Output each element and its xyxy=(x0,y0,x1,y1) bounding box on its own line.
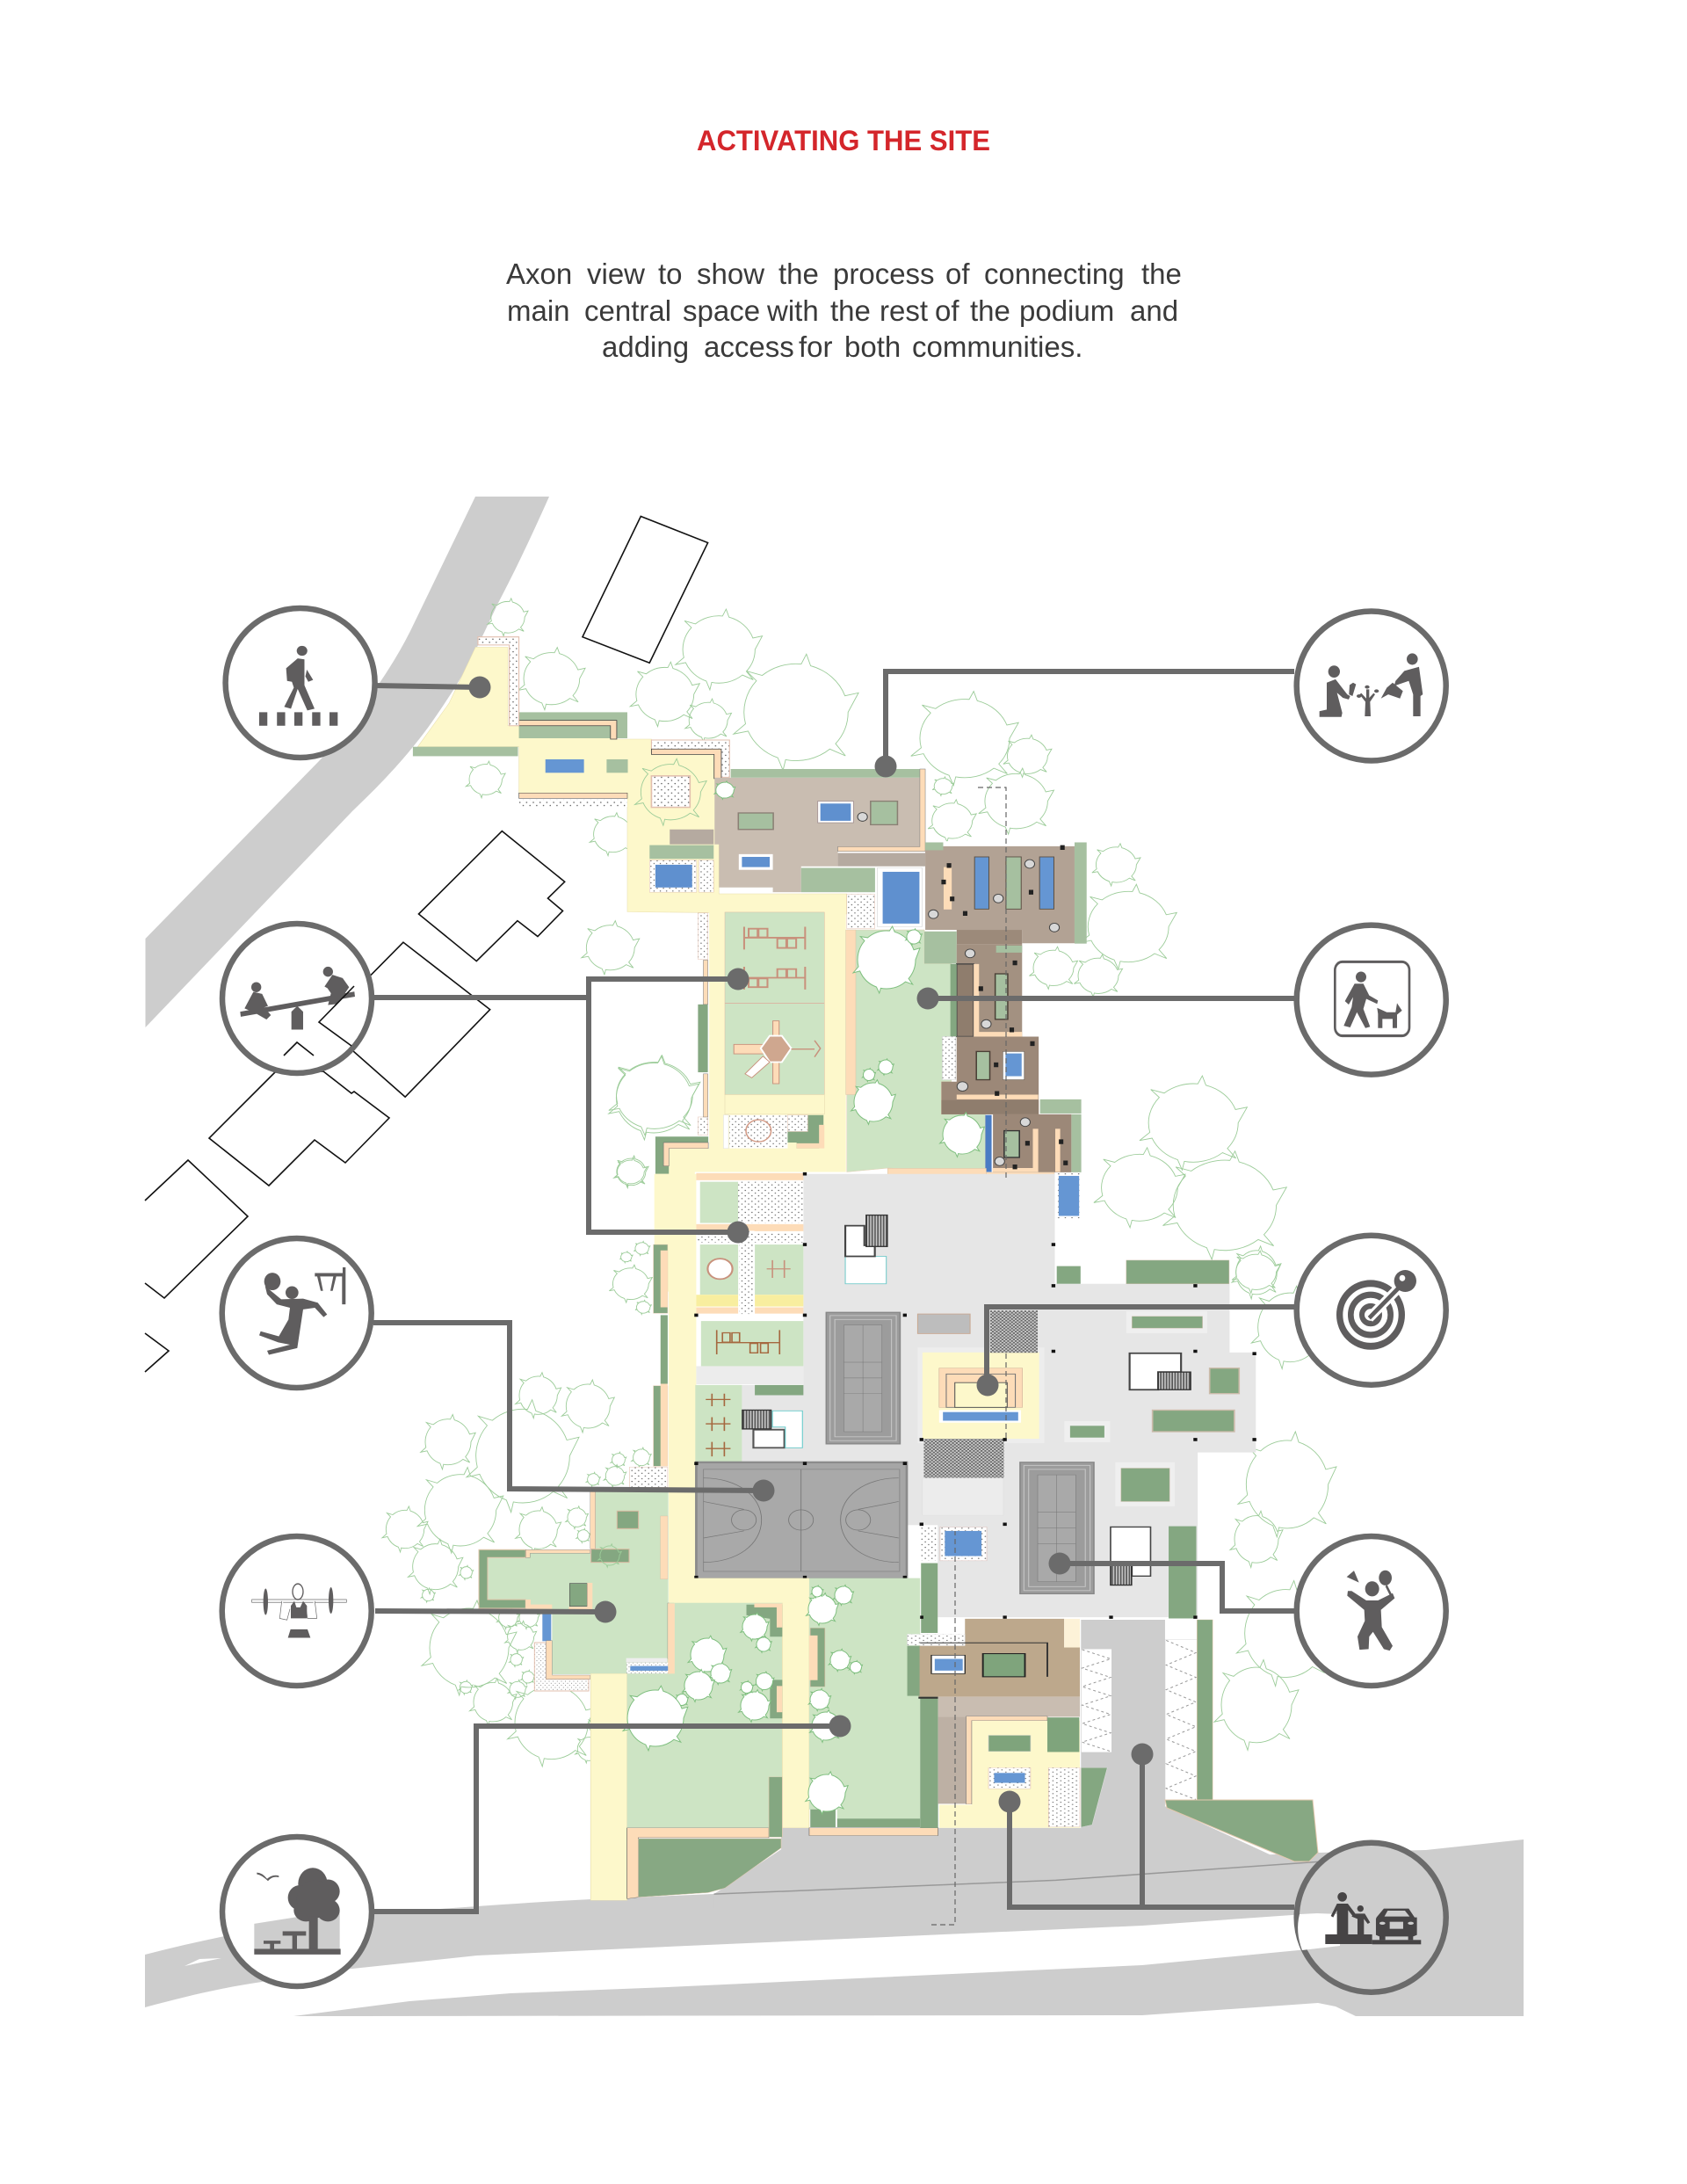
building: house 6 fragment xyxy=(145,1333,169,1372)
icon: seesaw xyxy=(222,924,372,1073)
cream stair xyxy=(1064,1619,1080,1648)
bench xyxy=(809,1636,818,1680)
corner pit xyxy=(787,1115,807,1131)
play tower xyxy=(734,1021,821,1084)
trees: south east group xyxy=(1214,1246,1336,1750)
green corner planter xyxy=(787,1115,823,1149)
peach seat wall xyxy=(519,721,617,739)
divide xyxy=(725,1002,824,1004)
planter xyxy=(1047,1717,1079,1752)
peach xyxy=(568,1607,592,1609)
white bar xyxy=(723,1115,728,1149)
yellow path column xyxy=(655,1174,809,1810)
description text block: for xyxy=(799,330,833,363)
trees outside site xyxy=(382,599,1336,1767)
green verge xyxy=(413,747,518,756)
connector end dots xyxy=(469,677,1153,1812)
dotted planter strip east xyxy=(651,740,729,777)
peach edge xyxy=(704,1074,708,1117)
pale pad xyxy=(1115,1462,1175,1506)
planter xyxy=(1121,1469,1169,1501)
south lawns and south terrace xyxy=(590,1578,1318,1908)
dotted strip xyxy=(908,1634,965,1645)
lawn xyxy=(809,1578,920,1818)
road: upper left diagonal xyxy=(146,497,549,1027)
blue rill xyxy=(985,1115,992,1172)
planter xyxy=(983,1654,1025,1677)
terrace 3 xyxy=(941,1036,1039,1114)
lower seat wall xyxy=(519,793,627,798)
icon: parent, child and car drop-off xyxy=(1297,1843,1446,1992)
ramp east xyxy=(838,853,925,867)
trees: north group xyxy=(466,599,858,1188)
small black people marks xyxy=(941,845,1068,1169)
connectors xyxy=(373,671,1294,1912)
dark strip xyxy=(951,964,957,1036)
forecourt paving xyxy=(417,647,847,914)
parking bays east xyxy=(1165,1640,1197,1800)
icon: pedestrian crossing xyxy=(226,608,375,758)
west strip dark xyxy=(698,1005,708,1072)
white carriageway inside the circle xyxy=(1298,1913,1340,1950)
plaza and courts xyxy=(630,1172,1256,1810)
planter xyxy=(617,1511,639,1528)
amphitheatre pool xyxy=(939,1410,1021,1423)
peach bench xyxy=(696,1224,803,1231)
green sliver xyxy=(1081,1767,1107,1827)
dark strip xyxy=(674,1604,686,1673)
dotted pad xyxy=(649,860,697,892)
water bars and planters xyxy=(974,857,989,909)
grey plaza xyxy=(803,1174,1256,1617)
description text block: access xyxy=(704,330,794,363)
trees: west group xyxy=(382,1373,651,1767)
lawn xyxy=(755,1244,803,1295)
west strip planter 3 xyxy=(654,1386,668,1466)
grey kiosk xyxy=(917,1314,970,1333)
grey walkway xyxy=(696,1366,803,1384)
building: house 3 xyxy=(320,942,490,1097)
central paved spine and brown terraces xyxy=(649,769,1087,1292)
planter xyxy=(738,813,773,830)
description text block: adding xyxy=(602,330,689,363)
planters xyxy=(1057,1266,1081,1284)
tree pit xyxy=(651,776,690,808)
lawn xyxy=(701,1321,803,1366)
description text block: of xyxy=(945,258,970,290)
tree ring in planter xyxy=(598,1544,621,1567)
icon: picnic under tree xyxy=(222,1837,372,1986)
yellow path xyxy=(782,1579,809,1828)
dark strip xyxy=(920,1697,938,1828)
dotted pad xyxy=(1048,1767,1080,1827)
dotted pad xyxy=(699,860,713,892)
white round tree on terrace xyxy=(714,781,735,799)
peach wall xyxy=(525,1549,590,1557)
building: house 2 xyxy=(418,831,565,961)
peach wall xyxy=(525,1600,552,1609)
green court xyxy=(801,867,875,892)
pool xyxy=(1003,1051,1025,1080)
planter xyxy=(569,1584,587,1607)
water xyxy=(630,1666,670,1671)
terrace round tree pits xyxy=(858,813,1060,1165)
pale pad xyxy=(1064,1421,1110,1442)
peach L xyxy=(547,1641,590,1680)
lawn xyxy=(700,1182,738,1223)
description text block: central xyxy=(584,294,671,327)
green wedge xyxy=(638,1839,781,1897)
peach wall xyxy=(590,1491,596,1549)
dotted xyxy=(738,1182,803,1223)
amphitheatre pale base xyxy=(917,1347,1045,1443)
lawn xyxy=(695,1385,742,1462)
description text block: the xyxy=(830,294,871,327)
dotted band xyxy=(696,1233,803,1243)
description text block: with xyxy=(766,294,819,327)
peach corner xyxy=(627,1828,769,1898)
peach edge xyxy=(668,1603,675,1673)
black edge xyxy=(918,1697,938,1699)
connector: seesaw xyxy=(374,979,738,1232)
roads xyxy=(145,497,1524,2016)
pool small water xyxy=(742,857,770,867)
parking bays west xyxy=(1081,1649,1111,1752)
description text block: connecting xyxy=(984,258,1125,290)
white sill xyxy=(945,841,1074,845)
bench xyxy=(777,1686,782,1712)
west pool group xyxy=(649,845,713,859)
west strip dotted xyxy=(698,1117,708,1135)
connector: picnic xyxy=(374,1726,840,1912)
west lawn wing xyxy=(479,1491,686,1691)
green strip xyxy=(1075,842,1087,944)
terrace 2 xyxy=(957,944,1022,1036)
amphitheatre xyxy=(939,1368,1023,1407)
pool water xyxy=(1005,1054,1022,1077)
description text block: main xyxy=(507,294,570,327)
lawn xyxy=(700,1244,738,1295)
peach L xyxy=(967,1716,1047,1804)
lawn xyxy=(847,930,985,1172)
peach bench xyxy=(696,1307,738,1314)
icon: weightlifter xyxy=(222,1536,372,1686)
parking zigzag xyxy=(1166,1640,1196,1799)
yellow central spine xyxy=(655,911,846,1292)
tan terrace xyxy=(918,1619,1080,1697)
pool pad xyxy=(940,1527,987,1561)
bench xyxy=(661,1516,668,1579)
connector: badminton xyxy=(1060,1564,1294,1611)
ramp xyxy=(938,1697,1080,1716)
green wedge east xyxy=(1165,1800,1318,1861)
planter xyxy=(996,974,1008,1019)
green L planter xyxy=(655,1136,708,1174)
description text block: to xyxy=(658,258,683,290)
planter xyxy=(988,1736,1031,1752)
planter xyxy=(770,1680,782,1718)
description text block: podium xyxy=(1019,294,1114,327)
parking zigzag xyxy=(1082,1650,1111,1752)
planter xyxy=(810,1628,825,1687)
dark strip xyxy=(1169,1527,1197,1618)
description text block: the xyxy=(970,294,1010,327)
pool water xyxy=(655,865,692,888)
dark green C planter xyxy=(479,1549,525,1608)
pale pad xyxy=(1126,1311,1207,1333)
description text block: rest xyxy=(880,294,928,327)
icon: target xyxy=(1297,1236,1446,1385)
connector: target xyxy=(987,1307,1294,1385)
terrace 4 xyxy=(993,1114,1071,1172)
corner peach xyxy=(797,1125,824,1149)
core east xyxy=(1130,1353,1191,1389)
core north xyxy=(845,1215,887,1284)
fitness sets xyxy=(706,1394,730,1456)
green block xyxy=(925,842,943,850)
dotted pad xyxy=(921,1527,938,1561)
water xyxy=(945,1531,981,1556)
yellow pad xyxy=(755,1295,803,1307)
peach xyxy=(754,1603,782,1628)
dotted tree pit xyxy=(847,894,874,929)
large pool water xyxy=(883,872,919,924)
peach L xyxy=(974,964,1022,1036)
swing sets xyxy=(744,926,805,990)
icon: basketball xyxy=(222,1238,372,1388)
basketball court xyxy=(696,1462,907,1578)
peach long bench xyxy=(887,1168,986,1178)
description text block: view xyxy=(587,258,645,290)
description text block: communities. xyxy=(912,330,1082,363)
description text block: of xyxy=(935,294,959,327)
amphitheatre yellow ground xyxy=(923,1353,1039,1439)
small planter xyxy=(606,759,628,773)
water bar xyxy=(1039,857,1053,909)
lawn xyxy=(627,1603,782,1828)
dotted path xyxy=(739,1230,755,1314)
west strip planter 1 xyxy=(654,1244,668,1313)
pale panel xyxy=(923,1478,1003,1515)
dashed section line xyxy=(931,787,1006,1925)
upper planter xyxy=(519,712,627,738)
lower dotted strip xyxy=(519,800,627,807)
terrace 1 xyxy=(925,846,1075,943)
building: house 5 xyxy=(145,1160,248,1298)
icon: dog walking xyxy=(1297,925,1446,1075)
planter xyxy=(755,1385,803,1395)
rill xyxy=(542,1613,551,1641)
building: house 4 xyxy=(209,1071,389,1186)
description text block: the xyxy=(1141,258,1182,290)
top planter xyxy=(996,946,1022,953)
trees: east group xyxy=(609,692,1286,1314)
site plan xyxy=(413,637,1318,1925)
description text block: show xyxy=(697,258,764,290)
water xyxy=(935,1659,963,1671)
dotted play area xyxy=(729,1115,787,1149)
yellow path xyxy=(590,1673,627,1900)
lawn planters xyxy=(747,1605,782,1636)
ramp xyxy=(670,830,713,845)
tennis court 1 xyxy=(826,1312,900,1444)
grey plot xyxy=(742,1385,804,1462)
band planter xyxy=(731,769,920,778)
play cross xyxy=(767,1260,791,1278)
checker paving north xyxy=(990,1310,1038,1353)
dotted planter strip xyxy=(478,637,519,726)
lawn xyxy=(488,1491,669,1674)
blue pool north east xyxy=(1057,1173,1081,1218)
peach xyxy=(668,1603,674,1658)
description text block xyxy=(506,258,1182,363)
peach bar xyxy=(1055,1128,1061,1172)
planter xyxy=(591,1549,629,1563)
north terrace taupe xyxy=(714,778,920,892)
icon: badminton xyxy=(1297,1536,1446,1686)
peach L xyxy=(663,1143,708,1166)
carousel xyxy=(707,1259,733,1279)
dotted strip xyxy=(942,1036,956,1080)
green strip xyxy=(1071,1114,1082,1172)
core xyxy=(742,1410,802,1448)
yellow pad xyxy=(696,1295,738,1307)
peach lawn edge xyxy=(846,930,856,1095)
pool pad xyxy=(988,1767,1031,1789)
connector: drop-off xyxy=(1010,1754,1294,1907)
road: white carriageway stripe xyxy=(145,1913,1340,2016)
north entry wing xyxy=(413,637,847,914)
description text block: the xyxy=(778,258,819,290)
planter xyxy=(976,1051,990,1080)
yellow plaza xyxy=(669,1578,809,1603)
water xyxy=(1059,1176,1079,1215)
outline wall xyxy=(920,1643,1047,1677)
planter xyxy=(1126,1260,1229,1284)
description text block: Axon xyxy=(506,258,572,290)
house lines crossing the circle xyxy=(284,986,354,1056)
inner ramp xyxy=(957,964,974,1036)
amphitheatre water xyxy=(943,1412,1018,1420)
description text block: space xyxy=(683,294,760,327)
block xyxy=(810,1810,836,1827)
west strip peach 1 xyxy=(661,1251,668,1307)
tennis court 2 xyxy=(1020,1462,1094,1593)
peach bench xyxy=(696,1173,803,1180)
pool small xyxy=(739,854,773,870)
planter xyxy=(1070,1426,1104,1438)
ramp xyxy=(938,1716,967,1803)
seat bar xyxy=(944,867,952,910)
water feature xyxy=(546,759,584,773)
peach edge xyxy=(704,960,708,1005)
peach bench xyxy=(755,1307,803,1314)
playground lawn xyxy=(725,912,824,1095)
road: small white sliver xyxy=(185,1958,221,1966)
planter xyxy=(1210,1368,1239,1394)
checker paving south xyxy=(923,1439,1004,1478)
neighbouring building outlines xyxy=(145,516,708,1372)
planter xyxy=(871,802,897,824)
title: ACTIVATING THE SITE xyxy=(697,125,990,156)
road: bottom band xyxy=(145,1839,1524,2016)
pool pad xyxy=(626,1663,673,1673)
west strip planter 2 xyxy=(661,1315,668,1384)
driveway xyxy=(714,1620,1318,1908)
peach bar xyxy=(809,1828,938,1836)
yellow stripe xyxy=(725,1095,824,1114)
pool water xyxy=(821,803,851,821)
block xyxy=(837,1818,920,1827)
pool xyxy=(931,1655,965,1673)
connector: weights xyxy=(375,1611,605,1612)
strip xyxy=(769,1777,782,1837)
dotted tree pit by court xyxy=(630,1467,668,1487)
seat wall east xyxy=(651,749,721,779)
green block xyxy=(924,932,957,963)
column markers xyxy=(694,1172,1256,1619)
core south xyxy=(1111,1527,1150,1585)
terrace peach edge xyxy=(838,769,925,852)
green strip xyxy=(1197,1620,1213,1800)
west strip dotted xyxy=(698,913,708,959)
peach bar xyxy=(957,1095,1039,1099)
large pool xyxy=(877,867,922,926)
tree ring over pit xyxy=(635,758,706,825)
play frame xyxy=(717,1330,779,1354)
planter xyxy=(1153,1410,1234,1432)
connector: basketball xyxy=(373,1323,764,1491)
ramp xyxy=(941,1100,1039,1114)
dotted L xyxy=(534,1643,589,1691)
description text block: both xyxy=(844,330,901,363)
ramp xyxy=(957,930,1022,944)
description text block: process xyxy=(833,258,935,290)
connector: pedestrian xyxy=(374,686,480,687)
connector: gardening xyxy=(886,671,1294,766)
yellow terrace xyxy=(939,1721,1080,1828)
connector: dog walking xyxy=(928,996,1294,1001)
description text block: and xyxy=(1130,294,1178,327)
pale ledge xyxy=(626,1658,667,1662)
peach xyxy=(587,1583,592,1608)
green strip xyxy=(908,1646,920,1696)
green strip xyxy=(1040,1099,1082,1114)
peach L xyxy=(993,1128,1039,1172)
peach bench xyxy=(986,1172,1054,1178)
planter bar xyxy=(1006,857,1021,909)
planter xyxy=(1004,1131,1019,1157)
water xyxy=(994,1773,1025,1783)
dark strip xyxy=(921,1564,938,1633)
carousel xyxy=(746,1120,771,1142)
planter xyxy=(1132,1317,1203,1328)
lawn trees xyxy=(623,926,984,1814)
west strip peach 3 xyxy=(661,1384,668,1466)
building: rectangle block xyxy=(320,516,708,1097)
thin boundary line xyxy=(714,1861,1318,1894)
pool xyxy=(818,802,853,823)
icon: gardening xyxy=(1297,612,1446,761)
